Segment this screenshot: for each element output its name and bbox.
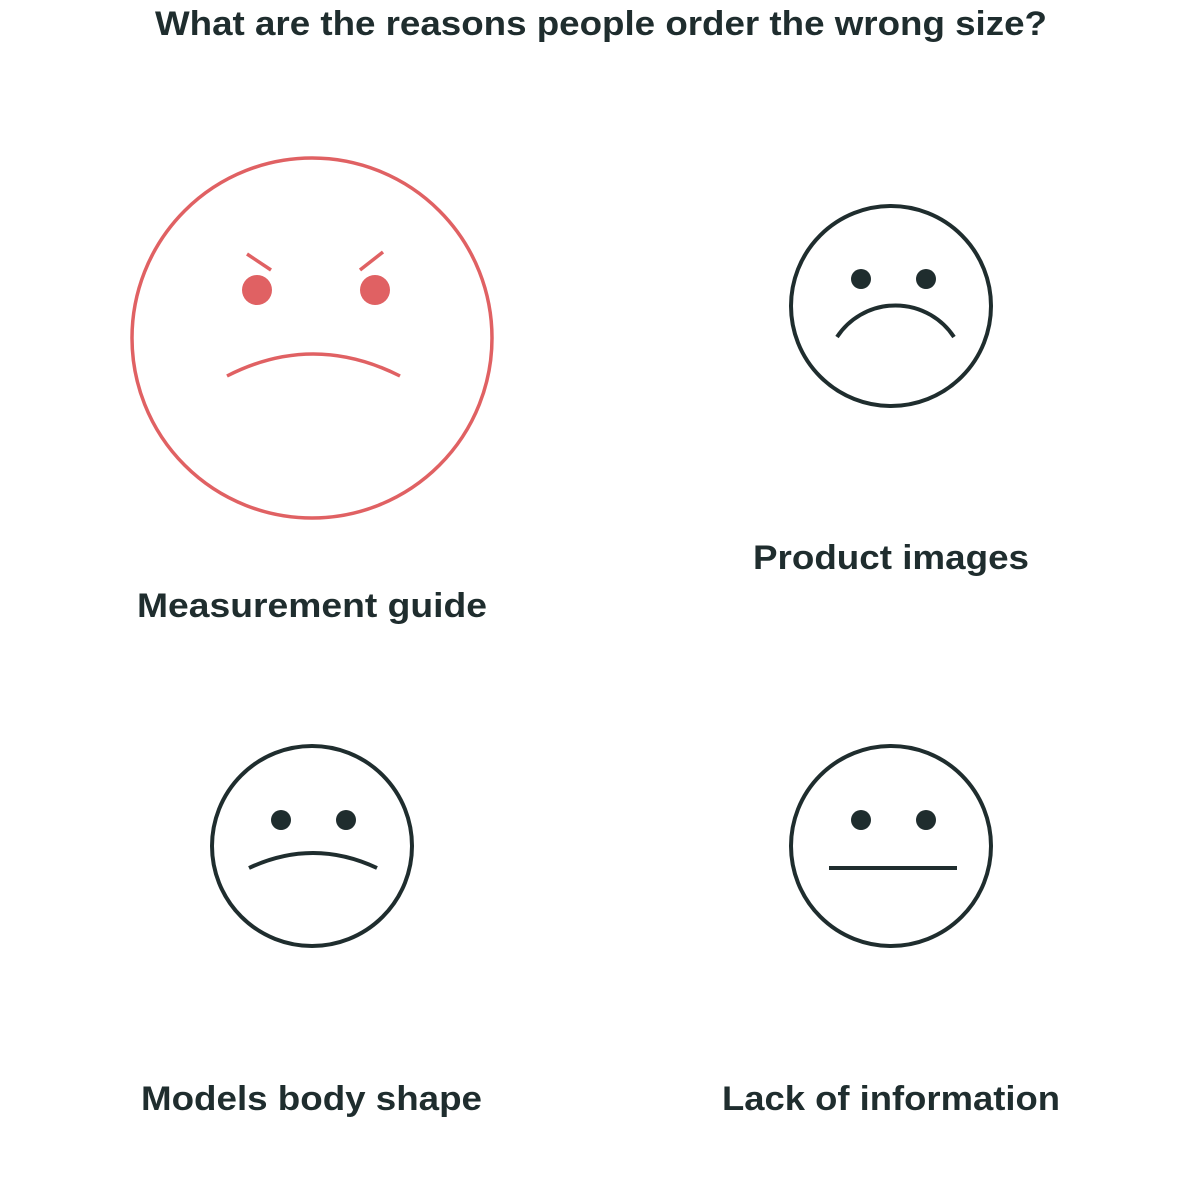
panel: measurement guide (132, 158, 492, 625)
panel: models body shape (141, 746, 482, 1118)
icon: unhappy face (212, 746, 412, 946)
title: What are the reasons people order the wrong size? (155, 5, 1047, 43)
label: models body shape: Models body shape (141, 1080, 482, 1118)
label: measurement guide: Measurement guide (137, 587, 487, 625)
icon: neutral face (791, 746, 991, 946)
label: lack of information: Lack of information (722, 1080, 1060, 1118)
panel: lack of information (722, 746, 1060, 1118)
icon: sad face (791, 206, 991, 406)
icon: angry face (132, 158, 492, 518)
label: product images: Product images (753, 539, 1029, 577)
panel: product images (753, 206, 1029, 577)
